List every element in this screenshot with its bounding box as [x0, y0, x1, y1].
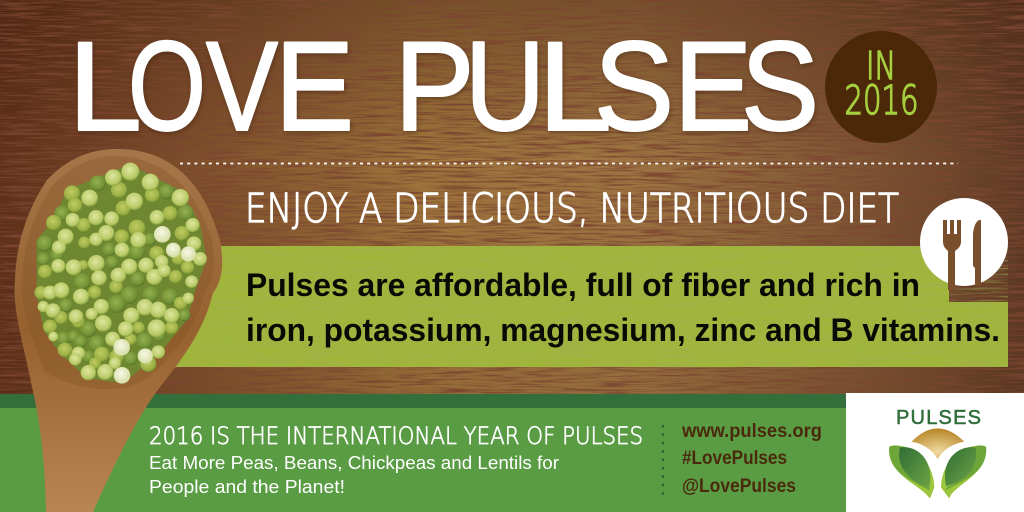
- title: Love Pulses: S: [741, 15, 819, 157]
- badge: in 2016: IN: [866, 44, 896, 88]
- subheading: ENJOY A DELICIOUS, NUTRITIOUS DIET: [245, 186, 899, 232]
- badge: in 2016: 2016: [844, 78, 918, 124]
- title: Love Pulses: [68, 15, 819, 157]
- logo: Pulses: [889, 407, 986, 499]
- icon: fork and knife: [920, 198, 1008, 290]
- footer text: [149, 422, 643, 497]
- footer links: #LovePulses: [682, 448, 787, 469]
- title: Love Pulses: L: [538, 15, 612, 157]
- message text: iron, potassium, magnesium, zinc and B vitamins.: [246, 312, 1000, 348]
- footer links: @LovePulses: [682, 476, 796, 497]
- title: Love Pulses: P: [394, 15, 474, 157]
- logo: Pulses: PULSES: [896, 407, 981, 429]
- title: Love Pulses: S: [594, 15, 674, 157]
- title: Love Pulses: U: [465, 15, 545, 157]
- dotted vertical divider: [662, 425, 664, 498]
- footer links: www.pulses.org: [681, 421, 822, 442]
- wooden spoon with split peas: [15, 149, 222, 512]
- title: Love Pulses: L: [68, 15, 142, 157]
- dotted divider: [180, 162, 958, 164]
- wood background: [0, 0, 1024, 394]
- footer text: People and the Planet!: [149, 477, 345, 497]
- title: Love Pulses: V: [206, 15, 278, 157]
- split peas: [34, 163, 207, 384]
- title: Love Pulses: E: [674, 15, 752, 157]
- message text: [246, 267, 1000, 348]
- badge: in 2016: [825, 31, 937, 143]
- green message band: [150, 246, 1008, 367]
- spoon: [15, 149, 222, 512]
- footer band: [0, 394, 1024, 512]
- footer text: 2016 IS THE INTERNATIONAL YEAR OF PULSES: [149, 422, 643, 450]
- message text: Pulses are affordable, full of fiber and rich in: [246, 267, 920, 303]
- title: Love Pulses: E: [275, 15, 354, 157]
- title: Love Pulses: O: [128, 15, 206, 157]
- footer links: [681, 421, 822, 497]
- logo panel: [846, 393, 1024, 512]
- footer text: Eat More Peas, Beans, Chickpeas and Lentils for: [149, 453, 559, 473]
